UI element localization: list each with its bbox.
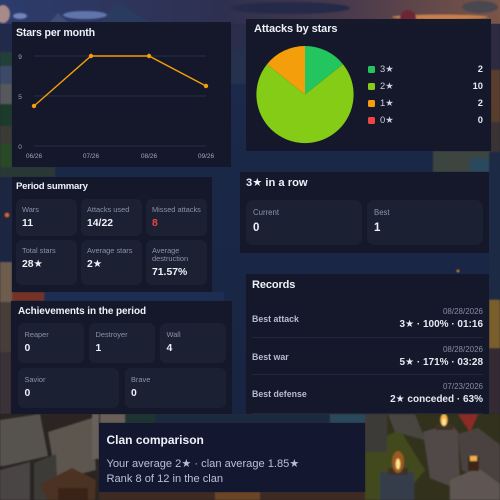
record: best defense: 2★ conceded · 63% bbox=[390, 394, 483, 405]
panel: attacks by stars bbox=[246, 19, 491, 151]
left strip scenery bbox=[0, 24, 12, 52]
panel: attacks by stars: 2 bbox=[478, 63, 483, 74]
stat: wars: Wars bbox=[22, 204, 39, 214]
line chart: 5 bbox=[18, 94, 22, 101]
stat: total stars: 28★ bbox=[22, 258, 43, 270]
panel: attacks by stars: 3★ bbox=[380, 63, 394, 74]
line chart: 07/26 bbox=[83, 153, 100, 160]
stat: reaper: 0 bbox=[24, 343, 30, 354]
stat: average destruction: 71.57% bbox=[152, 266, 187, 278]
record: best defense: 07/23/2026 bbox=[443, 382, 483, 391]
stat: average stars: 2★ bbox=[87, 258, 102, 270]
legend: 0 stars bbox=[368, 114, 483, 125]
stat: brave bbox=[124, 368, 226, 408]
stat: wall: Wall bbox=[166, 330, 181, 339]
gap scenery bbox=[231, 24, 246, 50]
line chart: 0 bbox=[18, 144, 22, 151]
record: best attack: 08/28/2026 bbox=[443, 307, 483, 316]
panel: attacks by stars: 2 bbox=[478, 97, 483, 108]
record: best defense: Best defense bbox=[252, 389, 307, 399]
left stones bbox=[0, 414, 48, 466]
legend: 3 stars bbox=[368, 63, 483, 74]
stat: brave: 0 bbox=[131, 388, 137, 399]
line chart: 9 bbox=[18, 54, 22, 61]
stat: destroyer: 1 bbox=[96, 343, 101, 354]
stat: current: Current bbox=[253, 208, 279, 216]
heading: stars per month: Stars per month bbox=[16, 27, 95, 39]
stat: missed attacks bbox=[146, 199, 207, 236]
stat: best bbox=[367, 200, 483, 245]
stat: total stars bbox=[16, 240, 77, 285]
stat: average destruction: Average bbox=[152, 246, 179, 254]
stat: destroyer: Destroyer bbox=[96, 330, 128, 339]
stat: attacks used: Attacks used bbox=[87, 204, 129, 214]
stat: savior: 0 bbox=[24, 388, 30, 399]
record: best war: 08/28/2026 bbox=[443, 345, 483, 354]
stat: best: 1 bbox=[374, 222, 380, 234]
stat: wars bbox=[16, 199, 77, 236]
record: best attack: 3★ · 100% · 01:16 bbox=[400, 319, 483, 330]
heading: achievements: Achievements in the period bbox=[18, 306, 146, 316]
stat: wars: 11 bbox=[22, 218, 33, 228]
heading: clan comparison: Clan comparison bbox=[106, 433, 204, 447]
stat: savior bbox=[18, 368, 119, 408]
panel: records bbox=[246, 274, 489, 414]
stat: reaper: Reaper bbox=[24, 330, 49, 339]
line chart: 08/26 bbox=[141, 153, 158, 160]
record: best attack: Best attack bbox=[252, 314, 299, 324]
stat: attacks used bbox=[81, 199, 142, 236]
heading: period summary: Period summary bbox=[16, 181, 88, 192]
stat: current: 0 bbox=[253, 222, 259, 234]
text: clan rank: Rank 8 of 12 in the clan bbox=[106, 473, 223, 485]
panel: period summary bbox=[12, 177, 212, 292]
panel: clan comparison bbox=[99, 423, 365, 492]
stat: total stars: Total stars bbox=[22, 246, 56, 254]
line chart: 09/26 bbox=[198, 153, 215, 160]
panel: attacks by stars: 10 bbox=[473, 80, 483, 91]
stat: average stars bbox=[81, 240, 142, 285]
stat: missed attacks: Missed attacks bbox=[152, 204, 201, 214]
panel: attacks by stars: 0★ bbox=[380, 114, 394, 125]
heading: attacks by stars: Attacks by stars bbox=[254, 23, 337, 35]
panel: attacks by stars: 1★ bbox=[380, 97, 394, 108]
heading: records: Records bbox=[252, 279, 295, 291]
stat: savior: Savior bbox=[24, 375, 45, 384]
record: best attack bbox=[252, 299, 483, 338]
stat: attacks used: 14/22 bbox=[87, 218, 113, 228]
legend: 1 star bbox=[368, 97, 483, 108]
pie chart bbox=[256, 46, 354, 144]
record: best war: 5★ · 171% · 03:28 bbox=[400, 357, 483, 368]
bottom scenery bbox=[0, 414, 500, 500]
line chart: 06/26 bbox=[26, 153, 43, 160]
panel: achievements in the period bbox=[11, 301, 232, 414]
panel: stars per month bbox=[12, 22, 231, 167]
stat: current bbox=[246, 200, 362, 245]
stat: destroyer bbox=[89, 323, 155, 363]
heading: 3 stars in a row: 3★ in a row bbox=[246, 177, 308, 189]
line chart bbox=[18, 54, 215, 160]
stat: average destruction: destruction bbox=[152, 254, 188, 263]
panel: 3 stars in a row bbox=[240, 172, 489, 253]
stat: average stars: Average stars bbox=[87, 246, 132, 254]
stat: reaper bbox=[18, 323, 84, 363]
record: best war bbox=[252, 337, 483, 375]
stat: missed attacks: 8 bbox=[152, 218, 158, 228]
legend: 2 stars bbox=[368, 80, 483, 91]
stat: wall: 4 bbox=[166, 343, 172, 354]
stat: best: Best bbox=[374, 208, 390, 216]
stat: wall bbox=[160, 323, 226, 363]
record: best war: Best war bbox=[252, 352, 289, 362]
stat: average destruction bbox=[146, 240, 207, 285]
panel: attacks by stars: 2★ bbox=[380, 80, 394, 91]
text: clan averages: Your average 2★ · clan average 1.85★ bbox=[106, 458, 299, 470]
stat: brave: Brave bbox=[131, 375, 150, 384]
record: best defense bbox=[252, 375, 483, 414]
panel: attacks by stars: 0 bbox=[478, 114, 483, 125]
